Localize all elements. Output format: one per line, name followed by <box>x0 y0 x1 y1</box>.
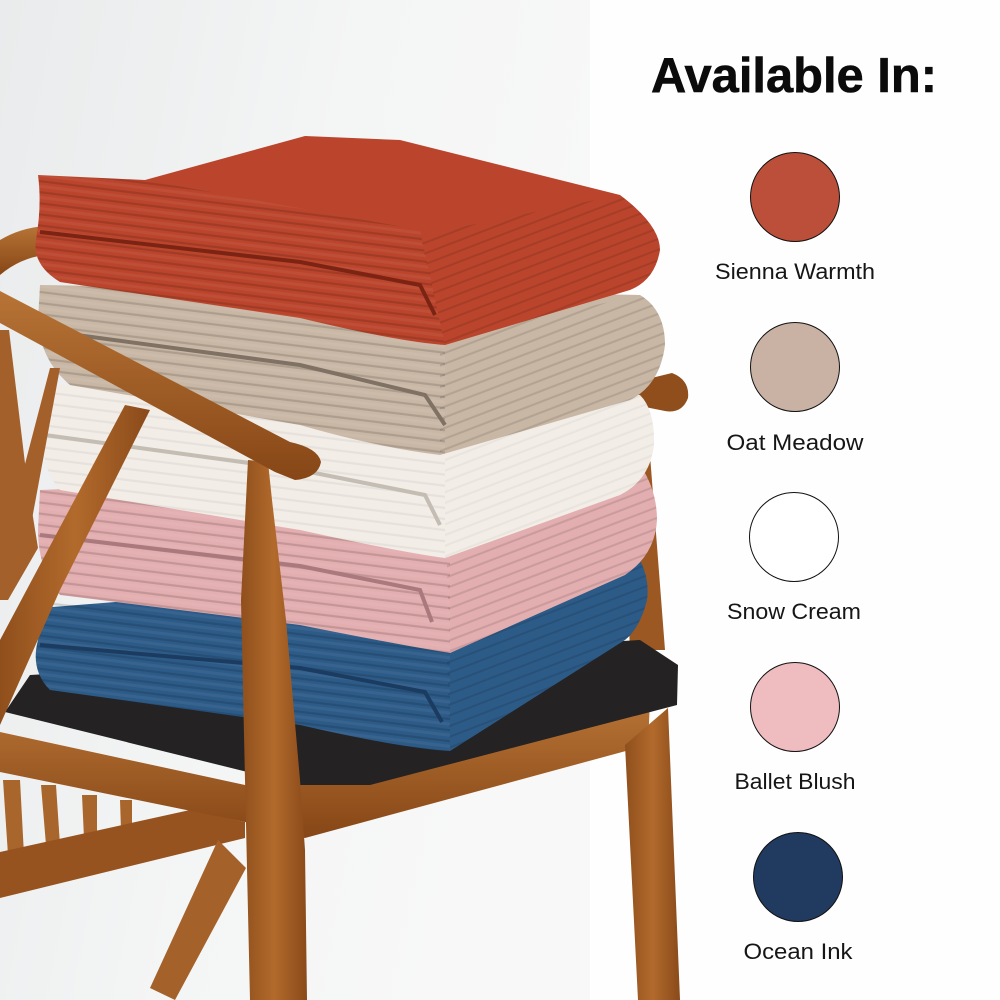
blanket: ballet blush <box>38 465 657 653</box>
swatch: Ballet Blush <box>734 662 856 794</box>
blanket: sienna warmth <box>36 136 660 345</box>
chair: seat cushion <box>5 640 678 785</box>
background: photo backdrop <box>0 0 590 1000</box>
swatch: Snow Cream <box>727 492 861 624</box>
swatch: Sienna Warmth: Sienna Warmth <box>715 259 875 284</box>
swatch: Sienna Warmth <box>715 152 875 284</box>
blanket: snow cream <box>43 385 654 558</box>
blanket: ocean ink <box>36 560 648 751</box>
swatch: Ocean Ink <box>744 832 854 964</box>
title: Available In: <box>651 49 937 103</box>
swatch: Oat Meadow <box>726 322 864 455</box>
background: white panel <box>590 0 1000 1000</box>
chair: seat front rail <box>0 700 650 838</box>
chair: front parts <box>0 291 680 1000</box>
chair: back parts <box>0 226 688 1000</box>
swatch: Ocean Ink: Ocean Ink <box>744 939 854 964</box>
swatch: Snow Cream: Snow Cream <box>727 599 861 624</box>
swatch: Ballet Blush: Ballet Blush <box>734 769 856 794</box>
swatch: Oat Meadow: Oat Meadow <box>726 430 864 455</box>
blanket: oat meadow <box>38 285 665 455</box>
